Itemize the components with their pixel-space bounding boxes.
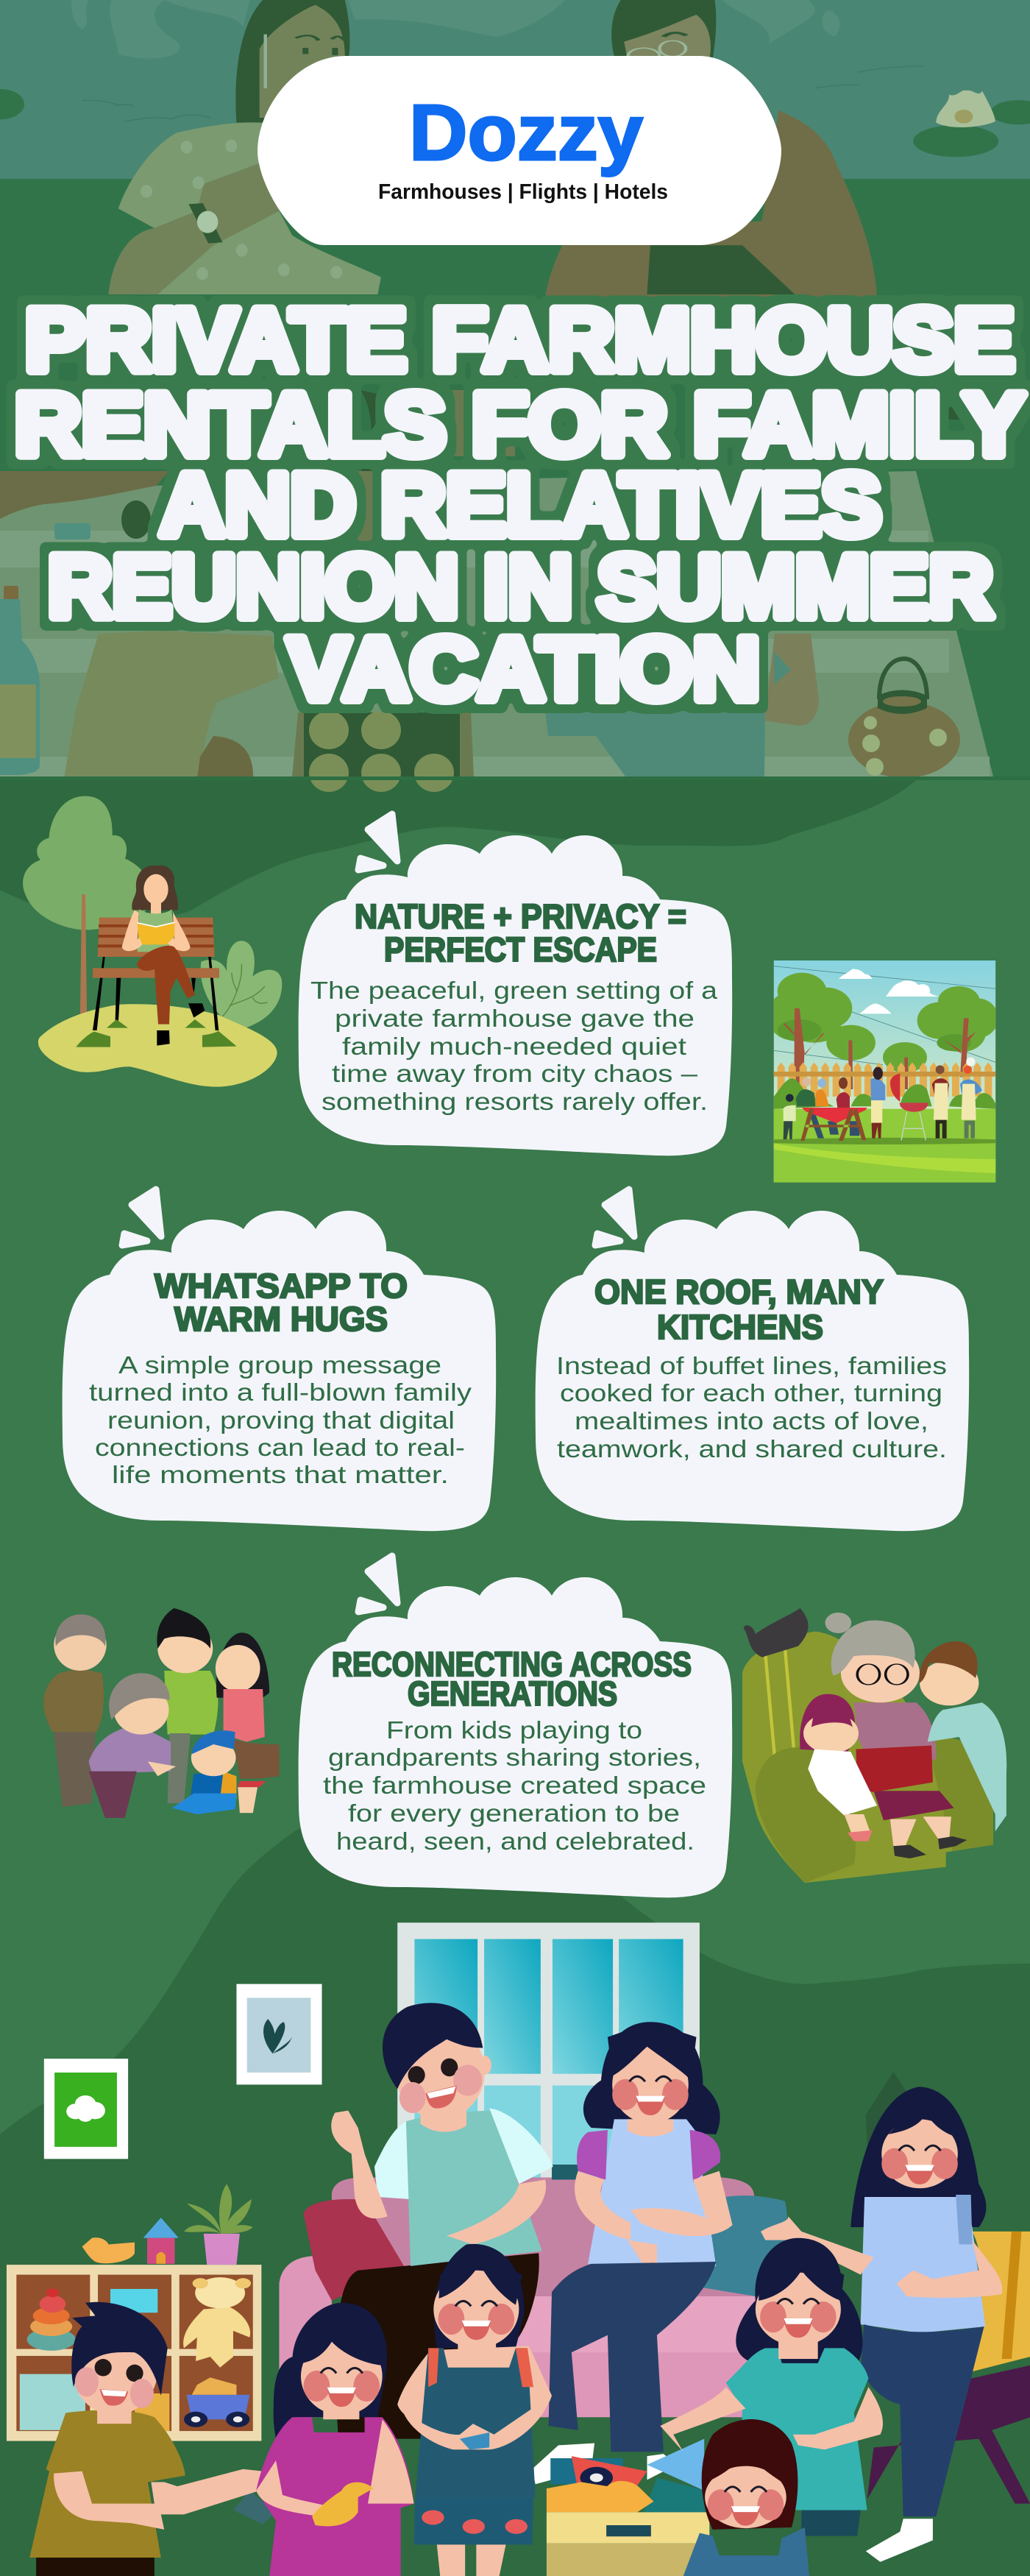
girl teal top braids: [660, 2238, 883, 2536]
card shape: [63, 1211, 496, 1531]
spark: [595, 1189, 634, 1245]
potted plant: [184, 2184, 253, 2265]
bottom strip: [0, 776, 1030, 780]
kitchens body text: cooked for each other, turning: [560, 1379, 942, 1406]
whatsapp body text: A simple group message: [118, 1351, 441, 1379]
sofa: [279, 2165, 788, 2417]
wall picture: cloud: [44, 2059, 128, 2159]
body text: time away from city chaos –: [332, 1060, 698, 1087]
woman figure: [108, 0, 381, 294]
man figure: [545, 0, 877, 297]
generations heading: [332, 1645, 692, 1713]
title: REUNION IN SUMMER: [48, 537, 993, 636]
body text: something resorts rarely offer.: [322, 1088, 708, 1115]
wagon: [184, 2377, 249, 2427]
toy box: [547, 2439, 709, 2576]
toy shelf: [7, 2184, 261, 2441]
hero background illustration: [0, 0, 1030, 792]
shoe: [197, 736, 253, 778]
picnic blanket: [0, 471, 993, 776]
sky water: [0, 0, 1030, 180]
whatsapp heading: WARM HUGS: [174, 1300, 388, 1338]
lily right: [913, 91, 1030, 157]
kitchens body text: Instead of buffet lines, families: [556, 1352, 947, 1379]
logo tagline: Farmhouses | Flights | Hotels: [378, 180, 668, 204]
generations body text: for every generation to be: [348, 1800, 680, 1827]
kitchens body text: teamwork, and shared culture.: [557, 1435, 947, 1462]
card: whatsapp to warm hugs: [63, 1189, 496, 1531]
girl teal: [397, 2244, 552, 2576]
body text: [310, 977, 718, 1115]
lily pad left: [0, 89, 24, 119]
generations body text: From kids playing to: [386, 1716, 642, 1744]
kitchens heading: [594, 1273, 884, 1346]
generations heading: RECONNECTING ACROSS: [332, 1645, 692, 1683]
wall picture: leaf: [236, 1984, 322, 2084]
whatsapp body text: life moments that matter.: [112, 1461, 449, 1488]
whatsapp body text: reunion, proving that digital: [107, 1406, 455, 1434]
whatsapp heading: WHATSAPP TO: [154, 1267, 408, 1305]
duck: [82, 2237, 135, 2263]
lower background: [0, 776, 1030, 2576]
woman pants: [64, 631, 279, 778]
heading: [355, 897, 686, 969]
dark shapes behind title: [360, 390, 964, 471]
illustration: woman reading on bench: [23, 796, 282, 1087]
title: VACATION: [288, 620, 760, 718]
boy left: [29, 2302, 263, 2576]
kitchens body text: mealtimes into acts of love,: [575, 1407, 928, 1434]
toy house: [143, 2218, 179, 2264]
whatsapp body text: [89, 1351, 472, 1488]
body text: family much-needed quiet: [342, 1033, 686, 1060]
bottle: [0, 586, 40, 775]
kitchens body text: [556, 1352, 947, 1462]
spark: [122, 1189, 161, 1245]
whatsapp body text: connections can lead to real-: [95, 1434, 465, 1461]
generations body text: grandparents sharing stories,: [328, 1744, 701, 1771]
card: reconnecting across generations: [299, 1556, 732, 1897]
generations heading: GENERATIONS: [408, 1674, 617, 1713]
background wave: upper dark: [0, 776, 920, 921]
body text: The peaceful, green setting of a: [310, 977, 718, 1004]
right woman: [761, 2072, 1030, 2562]
water details: [0, 0, 1030, 157]
man: [331, 2003, 553, 2439]
illustration: grandma reading to kids: [742, 1608, 1006, 1883]
body text: private farmhouse gave the: [335, 1005, 695, 1032]
heading: PERFECT ESCAPE: [384, 930, 657, 969]
blue toy: [110, 2289, 157, 2313]
brown mid patch: [346, 390, 515, 545]
tree root: [0, 471, 169, 519]
kitchens heading: ONE ROOF, MANY: [594, 1273, 884, 1311]
blanket light stripes: [0, 531, 990, 776]
camera toy: [233, 2491, 276, 2524]
ring toy: [27, 2288, 76, 2351]
spark: [358, 814, 397, 870]
spark: [358, 1556, 397, 1612]
kitchens heading: KITCHENS: [657, 1308, 823, 1346]
girl pink: [256, 2303, 414, 2576]
title: [15, 291, 1025, 718]
title: RENTALS FOR FAMILY: [15, 375, 1025, 474]
illustration: backyard barbecue: [767, 960, 998, 1183]
card shape: [536, 1211, 969, 1531]
teal box: [20, 2374, 85, 2430]
sitting woman: [532, 2022, 733, 2484]
background wave: lower dark: [0, 1766, 1030, 2576]
card shape: [299, 835, 732, 1156]
whatsapp body text: turned into a full-blown family: [89, 1379, 472, 1406]
mooncake box: [292, 711, 474, 792]
basket: [848, 659, 960, 778]
card: nature + privacy: [299, 814, 732, 1156]
title: AND RELATIVES: [160, 456, 881, 554]
logo pill: [258, 56, 781, 245]
card shape: [299, 1577, 732, 1897]
bottom family scene: [7, 1922, 1030, 2576]
birds: [82, 66, 923, 121]
ripples: [71, 0, 839, 58]
dark blob: [121, 500, 151, 539]
heading: NATURE + PRIVACY =: [355, 897, 686, 935]
whatsapp heading: [154, 1267, 408, 1338]
generations body text: heard, seen, and celebrated.: [336, 1827, 695, 1855]
small girl: [683, 2419, 809, 2576]
illustration: three generation family: [43, 1608, 279, 1818]
generations body text: [323, 1716, 706, 1855]
card: one roof many kitchens: [536, 1189, 969, 1531]
logo wordmark: Dozzy: [409, 88, 643, 177]
window: [397, 1922, 700, 2204]
grass: [0, 179, 1030, 776]
blue cloth: [544, 651, 791, 776]
generations body text: the farmhouse created space: [323, 1772, 706, 1799]
title: PRIVATE FARMHOUSE: [25, 291, 1015, 389]
man arm: [764, 634, 819, 726]
jar lid: [54, 523, 90, 539]
toy truck: [135, 2393, 169, 2431]
teddy bear: [183, 2277, 251, 2368]
